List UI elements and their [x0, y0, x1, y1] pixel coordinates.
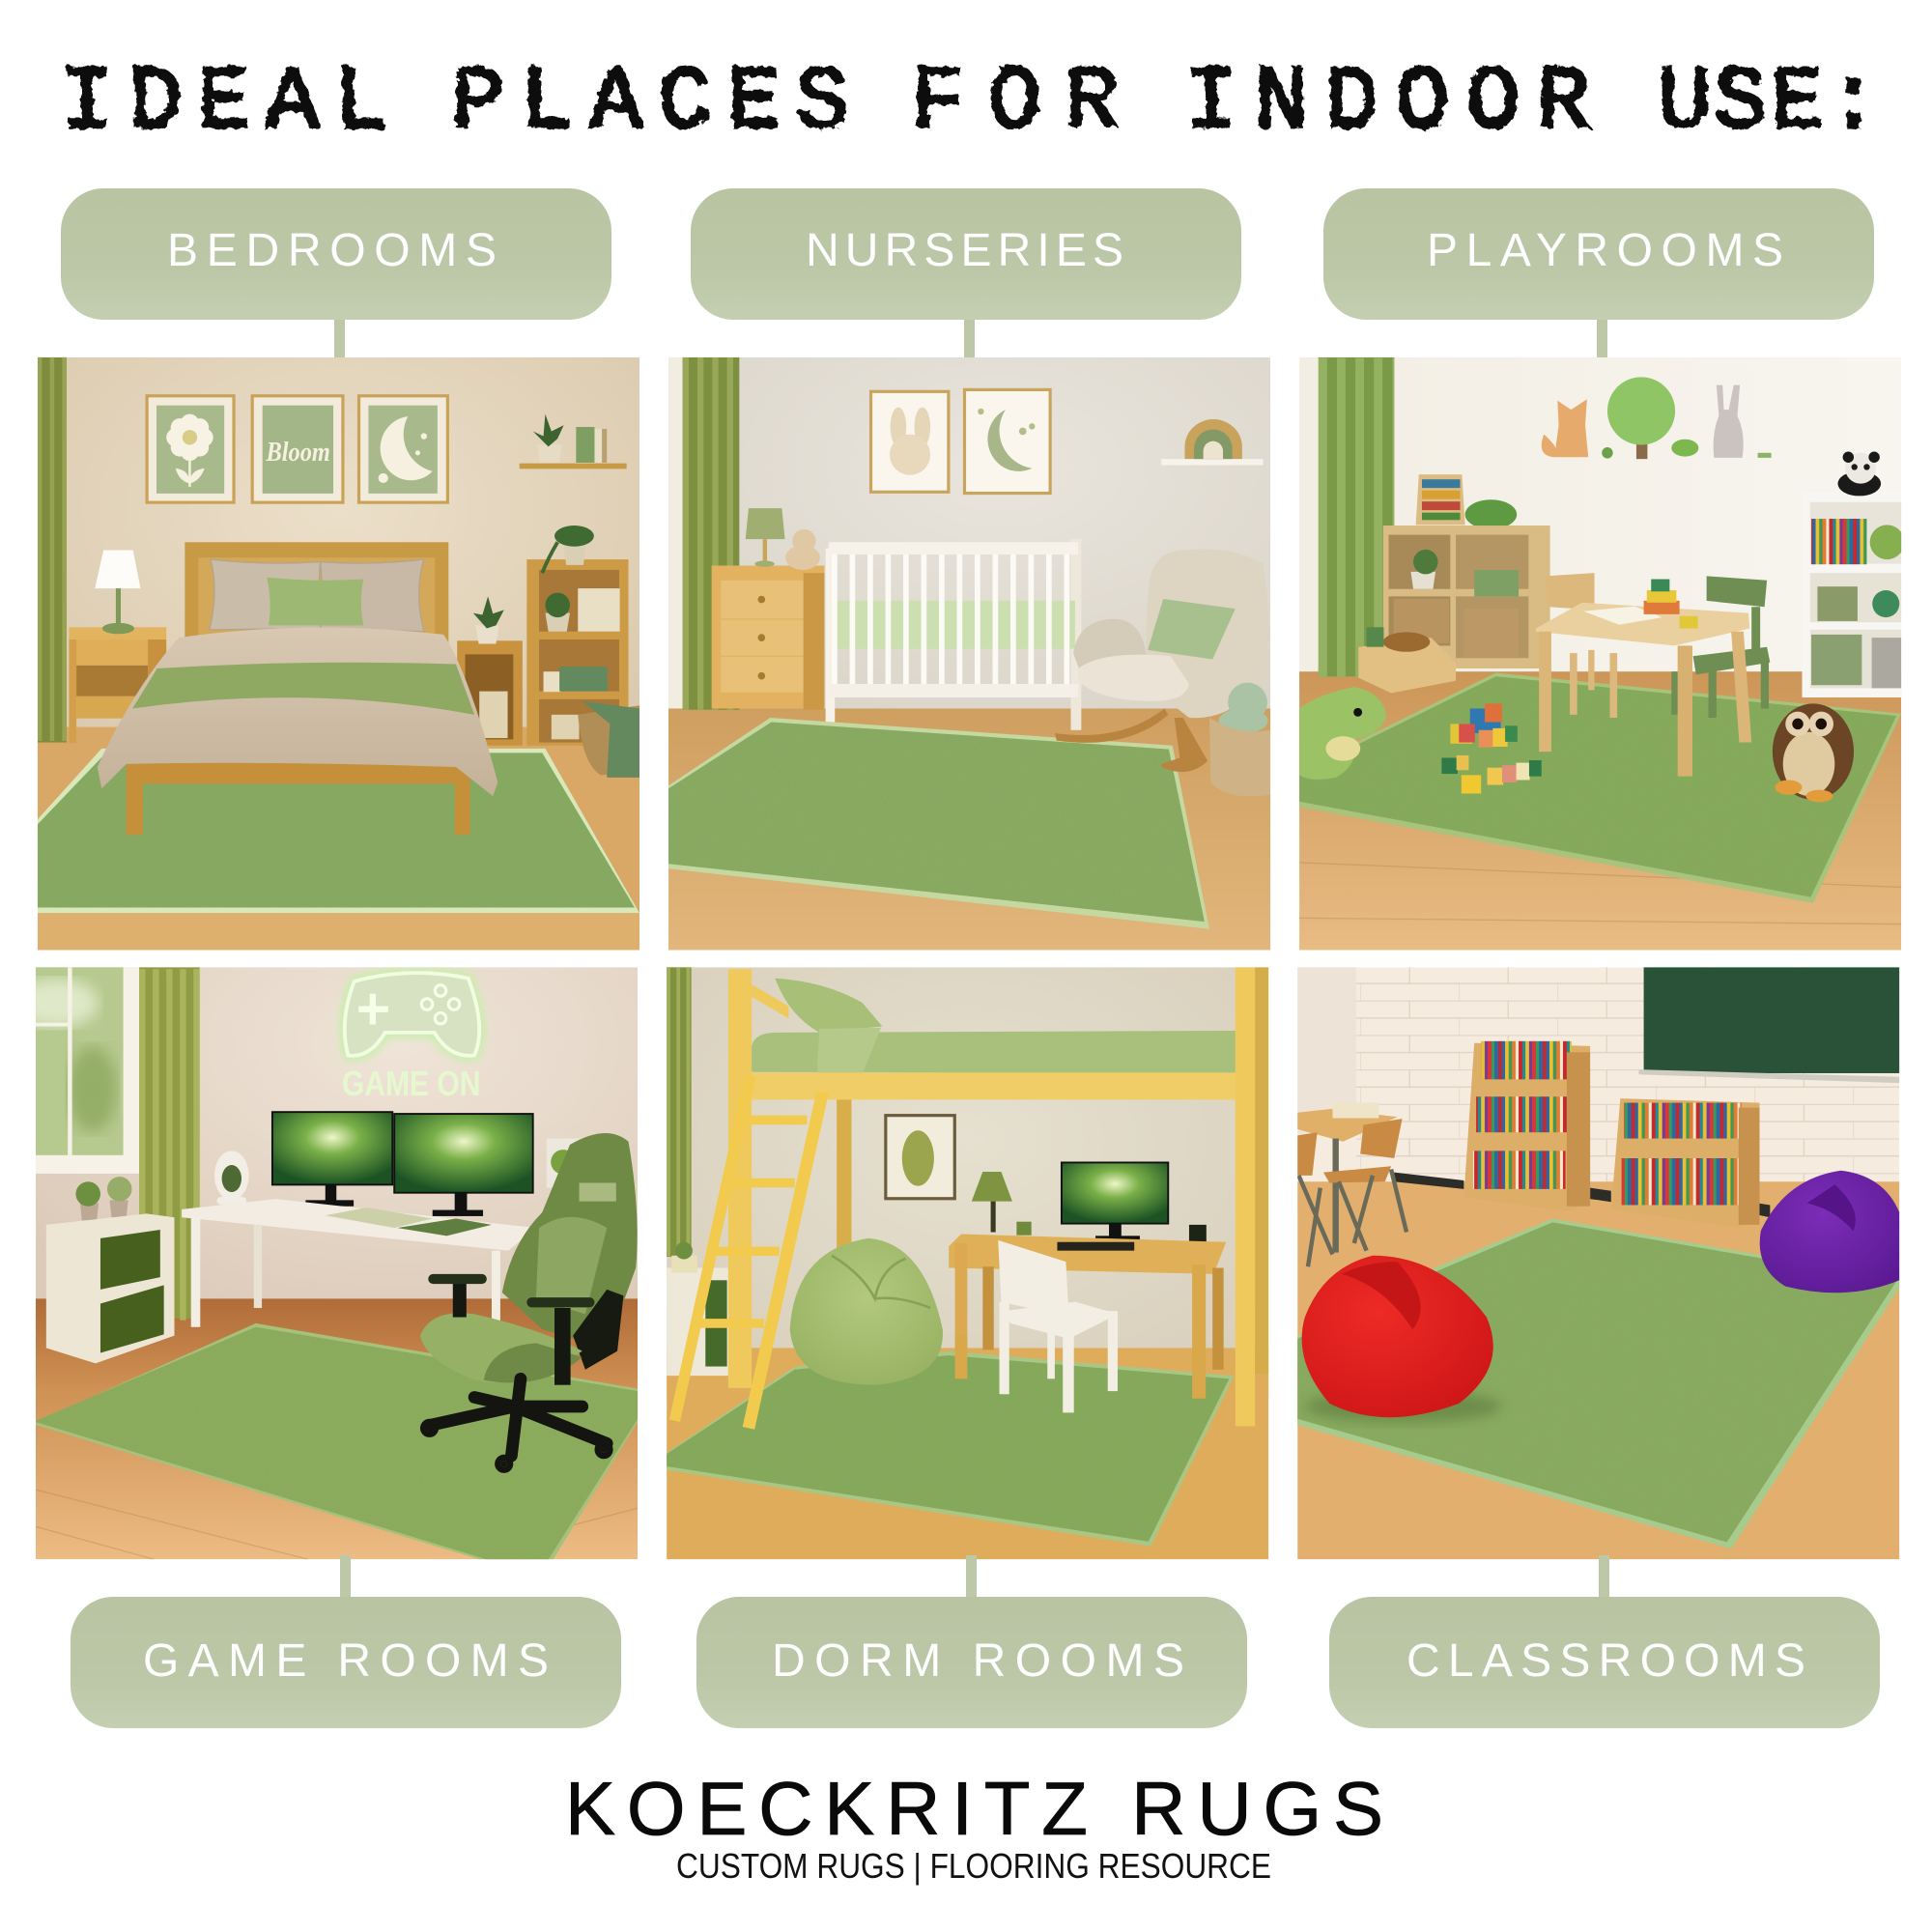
rug	[36, 1323, 638, 1559]
curtain	[139, 967, 200, 1319]
label: game rooms	[71, 1555, 621, 1728]
loft rail	[752, 1072, 1238, 1099]
purple beanbag fold	[1807, 1184, 1856, 1231]
desk	[949, 1234, 1226, 1399]
label: nurseries	[691, 188, 1241, 362]
gaming chair	[420, 1133, 638, 1385]
label: playrooms: PLAYROOMS	[1427, 225, 1783, 276]
chair base	[426, 1378, 607, 1467]
lamp	[746, 508, 785, 567]
wall shelf with rainbow	[1161, 419, 1263, 466]
cube shelf	[1383, 526, 1550, 668]
wall shelf	[520, 414, 627, 469]
neon sign	[342, 973, 480, 1103]
front post	[1236, 967, 1255, 1426]
beanbag	[790, 1238, 943, 1385]
curtain	[1319, 357, 1394, 676]
red beanbag	[1302, 1256, 1493, 1417]
throw band	[132, 663, 474, 715]
neon sign: GAME ON	[342, 1065, 480, 1103]
chalkboard	[1638, 967, 1899, 1083]
toy owl	[1773, 703, 1854, 802]
cabinet	[46, 1213, 174, 1363]
headboard	[185, 542, 448, 647]
wall art: bunny	[869, 390, 950, 494]
wall art: moon	[963, 388, 1052, 495]
wood chair	[1546, 573, 1617, 718]
bed legs	[127, 761, 470, 835]
rug	[667, 1351, 1235, 1547]
rocker	[1055, 708, 1208, 772]
basket	[578, 701, 639, 778]
label: bedrooms: BEDROOMS	[167, 225, 497, 276]
label: nurseries: NURSERIES	[806, 225, 1123, 276]
rug field	[36, 1327, 638, 1559]
duvet	[98, 628, 497, 796]
table and chairs	[1297, 1103, 1406, 1266]
wall art: moon print	[357, 394, 449, 504]
pillows	[210, 559, 424, 632]
title: FOR	[911, 52, 1119, 154]
label: dorm rooms: DORM ROOMS	[772, 1635, 1184, 1687]
rug	[1299, 672, 1901, 903]
panel: classroom scene	[1297, 967, 1899, 1559]
storage with plant	[667, 1242, 728, 1376]
framed leaf art	[884, 1114, 956, 1200]
back rails	[1255, 967, 1268, 1374]
purple beanbag	[1760, 1171, 1899, 1293]
wooden toy box	[1358, 627, 1456, 694]
rug field	[667, 1355, 1229, 1542]
white chair	[998, 1240, 1119, 1412]
headset and speaker	[214, 1139, 581, 1205]
desk legs front	[955, 1336, 1206, 1399]
rug field	[1297, 1222, 1896, 1542]
title	[61, 52, 1880, 154]
title: PLACES	[451, 52, 849, 154]
rug field	[1299, 676, 1896, 897]
wall art: flower print	[146, 394, 236, 504]
crib	[826, 539, 1081, 730]
rug field	[668, 723, 1205, 922]
curtain	[667, 967, 692, 1257]
rug field	[38, 753, 635, 907]
floor planks	[1299, 863, 1901, 924]
label: classrooms	[1329, 1555, 1880, 1728]
label: playrooms	[1323, 188, 1874, 362]
ladder	[674, 1076, 822, 1428]
wall decals	[1542, 377, 1772, 459]
bookcase	[526, 526, 629, 746]
desk lamp	[972, 1172, 1207, 1246]
panel: dorm room scene	[667, 967, 1268, 1559]
title: IDEAL	[61, 52, 387, 154]
floor planks	[36, 1490, 638, 1559]
armchair	[1073, 549, 1268, 718]
nightstand	[712, 566, 824, 710]
mattress	[752, 1031, 1238, 1074]
blanket	[816, 1028, 881, 1090]
floor edge	[38, 913, 639, 914]
basket with bear	[1209, 683, 1270, 796]
bookcase low	[1611, 1098, 1759, 1228]
side table	[457, 596, 523, 746]
window	[13, 967, 140, 1174]
monitors	[272, 1112, 533, 1216]
loft posts	[728, 969, 851, 1388]
shadow	[1305, 1390, 1502, 1423]
window strip	[668, 357, 684, 708]
toy blocks	[1441, 703, 1542, 793]
nightstand with lamp	[69, 551, 166, 743]
curtain	[683, 357, 739, 710]
rug	[1297, 1218, 1899, 1548]
panda	[1837, 452, 1881, 496]
panel: nursery scene	[668, 357, 1270, 950]
kids table	[1536, 580, 1751, 777]
teddy	[785, 529, 820, 570]
rug	[38, 749, 639, 913]
curtain	[38, 357, 67, 743]
white shelf	[1802, 493, 1904, 697]
monitor	[1062, 1162, 1168, 1241]
panel: bedroom scene	[38, 357, 639, 950]
wall art: bloom print: Bloom	[266, 438, 330, 468]
baseboard segments	[1394, 1173, 1770, 1217]
plants	[75, 1177, 131, 1220]
desk	[182, 1199, 536, 1327]
toy dinosaur	[1299, 687, 1386, 780]
label: game rooms: GAME ROOMS	[143, 1635, 549, 1687]
brand name: KOECKRITZ RUGS	[565, 1766, 1383, 1851]
red beanbag fold	[1342, 1262, 1421, 1329]
pillow	[775, 979, 882, 1033]
panel: game room scene	[13, 967, 638, 1559]
label: classrooms: CLASSROOMS	[1406, 1635, 1805, 1687]
bookcase tall	[1463, 1041, 1590, 1211]
panel: playroom scene	[1299, 357, 1904, 950]
label: bedrooms	[61, 188, 611, 362]
green chair	[1671, 576, 1770, 718]
brand tagline: CUSTOM RUGS | FLOORING RESOURCE	[676, 1846, 1271, 1886]
abacus and turtle	[1416, 474, 1517, 529]
title: INDOOR	[1184, 52, 1590, 154]
rug	[668, 718, 1209, 929]
label: dorm rooms	[696, 1555, 1247, 1728]
wall art: bloom print	[251, 394, 345, 504]
title: USE:	[1658, 52, 1880, 154]
